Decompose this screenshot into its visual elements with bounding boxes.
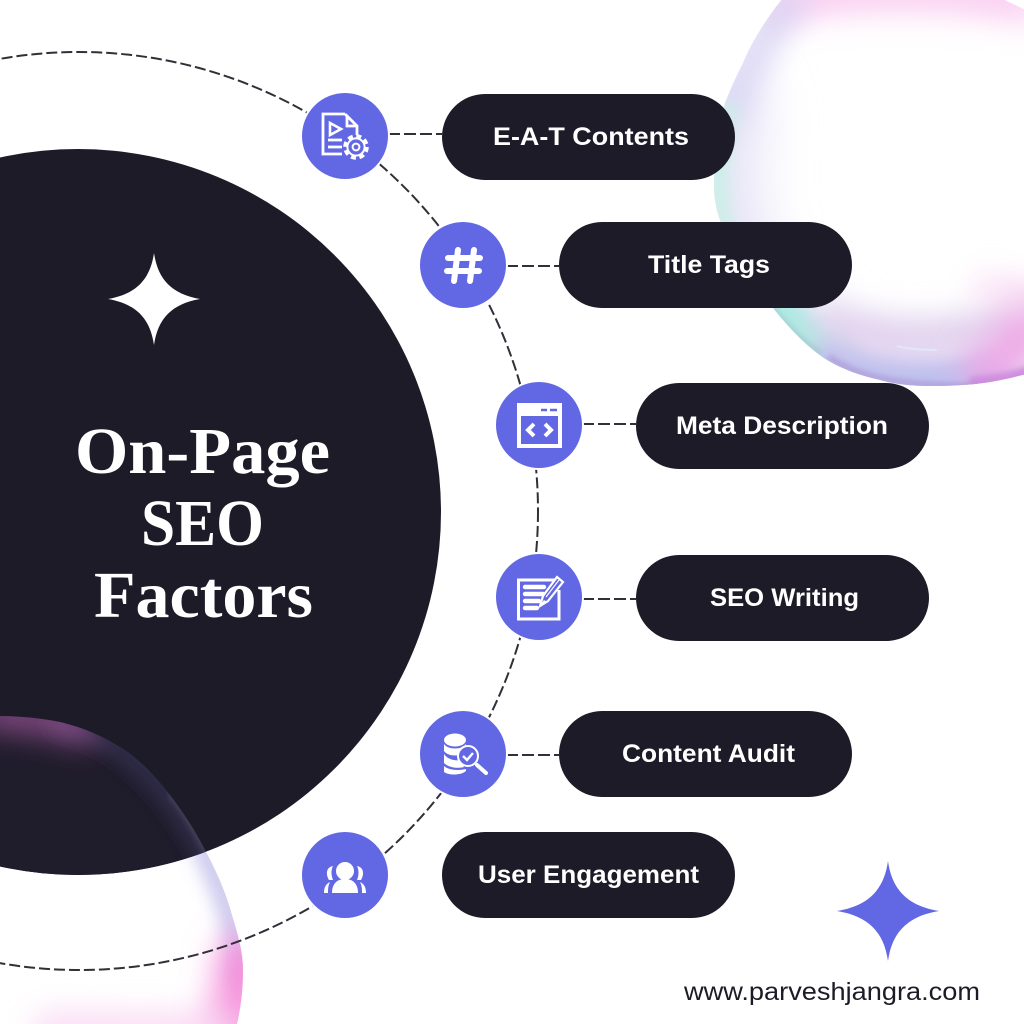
connector: Title Tags	[506, 265, 559, 267]
item: Meta Description	[495, 381, 929, 469]
icon node: code window	[495, 381, 583, 469]
pill: E-A-T Contents	[442, 94, 735, 180]
connector: SEO Writing	[582, 598, 636, 600]
item: Content Audit	[419, 710, 852, 798]
item: User Engagement	[301, 831, 735, 919]
icon node: document with gear	[301, 92, 389, 180]
website url: www.parveshjangra.com	[683, 978, 980, 1006]
dashed ring	[0, 52, 538, 970]
connector: Content Audit	[506, 754, 559, 756]
decorative bubble bottom left	[28, 852, 243, 1024]
label: Content Audit: Content Audit	[622, 740, 796, 768]
label: Title Tags: Title Tags	[648, 251, 770, 279]
label: User Engagement: User Engagement	[478, 861, 700, 889]
item: SEO Writing	[495, 553, 929, 641]
label: E-A-T Contents: E-A-T Contents	[493, 123, 689, 151]
label: Meta Description: Meta Description	[676, 412, 888, 440]
dark main circle	[0, 149, 441, 875]
bubble highlight	[897, 346, 937, 350]
icon node: user group	[301, 831, 389, 919]
pill: Content Audit	[559, 711, 852, 797]
pill: User Engagement	[442, 832, 735, 918]
pill: Meta Description	[636, 383, 929, 469]
icon node: notepad and pencil	[495, 553, 583, 641]
connector: E-A-T	[388, 133, 442, 135]
title	[75, 415, 330, 632]
item: Title Tags	[419, 221, 852, 309]
icon node: database with magnifier	[419, 710, 507, 798]
label: SEO Writing: SEO Writing	[710, 584, 859, 612]
icon: white star	[108, 253, 200, 345]
title: On-Page	[75, 415, 330, 488]
pill: Title Tags	[559, 222, 852, 308]
decorative bubble top right	[700, 0, 1024, 400]
icon node: hash	[419, 221, 507, 309]
connector: Meta Description	[582, 423, 636, 425]
title: SEO	[141, 487, 264, 560]
icon: blue star	[837, 861, 939, 961]
title: Factors	[94, 559, 313, 632]
item: E-A-T Contents	[301, 92, 735, 180]
bubble overlap tint on dark circle	[0, 716, 206, 875]
pill: SEO Writing	[636, 555, 929, 641]
